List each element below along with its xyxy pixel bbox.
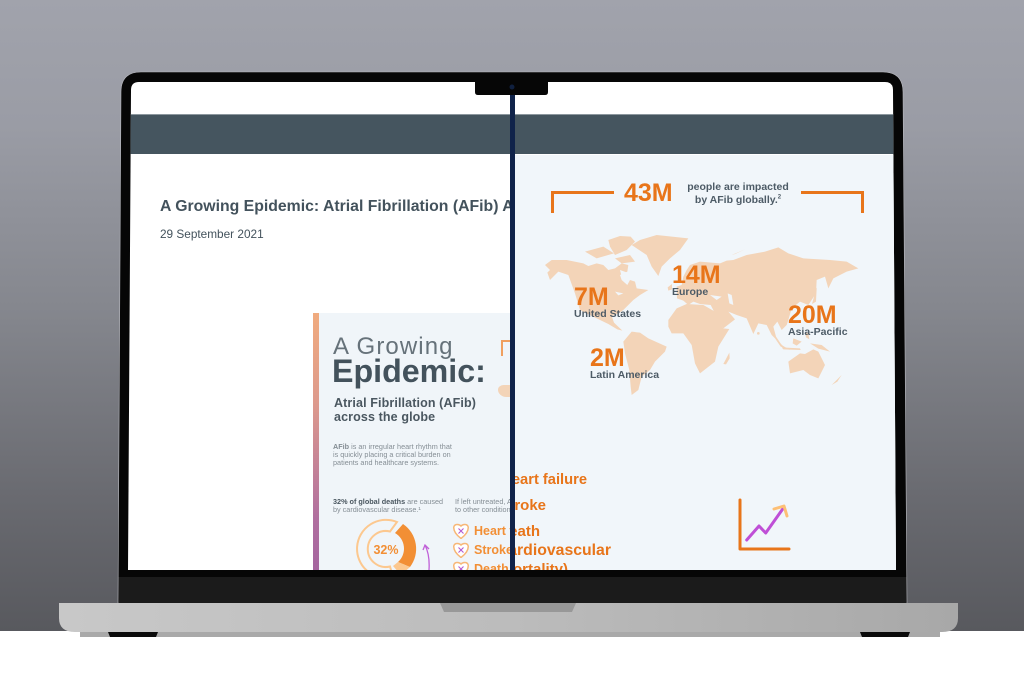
stat: 2M Latin America: Latin America [590, 369, 659, 381]
icon: purple arrow [422, 544, 430, 570]
navy divider line [510, 82, 515, 570]
stat: 14M Europe: 14M [672, 261, 721, 289]
definition text: patients and healthcare systems. [333, 458, 439, 467]
icon: heart [453, 562, 469, 570]
definition text: AFib is an irregular heart rhythm that [333, 442, 452, 451]
article date: 29 September 2021 [160, 226, 264, 240]
camera notch [475, 82, 548, 95]
definition text: is quickly placing a critical burden on [333, 450, 451, 459]
stat: 43M: 43M [624, 179, 673, 207]
stat: 20M Asia-Pacific: Asia-Pacific [788, 326, 848, 338]
untreated text [455, 498, 510, 512]
right bracket [801, 191, 864, 213]
icon: heart [453, 542, 469, 558]
map fragment [498, 385, 510, 397]
world map [545, 235, 858, 395]
donut chart 32%: 32% [373, 543, 399, 557]
stat: 7M United States: 7M [574, 283, 609, 311]
subheading [334, 398, 476, 424]
stat: 7M United States: United States [574, 308, 641, 320]
subheading: across the globe [334, 410, 435, 424]
icon: trend chart [738, 498, 790, 550]
panel: infographic right view [510, 155, 900, 570]
stat: 2M Latin America [590, 348, 660, 378]
stat: 20M Asia-Pacific: 20M [788, 301, 837, 329]
header band [120, 114, 910, 154]
subheading: Atrial Fibrillation (AFib) [334, 396, 476, 410]
stat caption: by AFib globally.2 [695, 194, 781, 206]
deaths text: 32% of global deaths are caused [333, 497, 443, 506]
stat: 7M United States [574, 288, 641, 317]
stat: 20M Asia-Pacific [788, 305, 848, 335]
stat: 2M Latin America: 2M [590, 344, 625, 372]
deaths text: by cardiovascular disease.¹ [333, 505, 421, 514]
stat: 14M Europe: Europe [672, 286, 708, 298]
definition text [333, 444, 452, 466]
heading: A Growing: A Growing [333, 333, 454, 360]
stat: 14M Europe [672, 266, 719, 297]
stat caption [688, 182, 788, 205]
deaths text [333, 498, 443, 514]
stat caption: people are impacted [687, 181, 789, 193]
left bracket [551, 191, 614, 213]
gradient strip [313, 313, 319, 570]
icon: heart [453, 524, 469, 539]
panel: infographic left view [313, 313, 510, 570]
laptop screen [128, 82, 896, 570]
bracket fragment [501, 340, 510, 356]
heading: Epidemic: Epidemic: [332, 353, 486, 389]
donut chart 32% [356, 518, 416, 570]
